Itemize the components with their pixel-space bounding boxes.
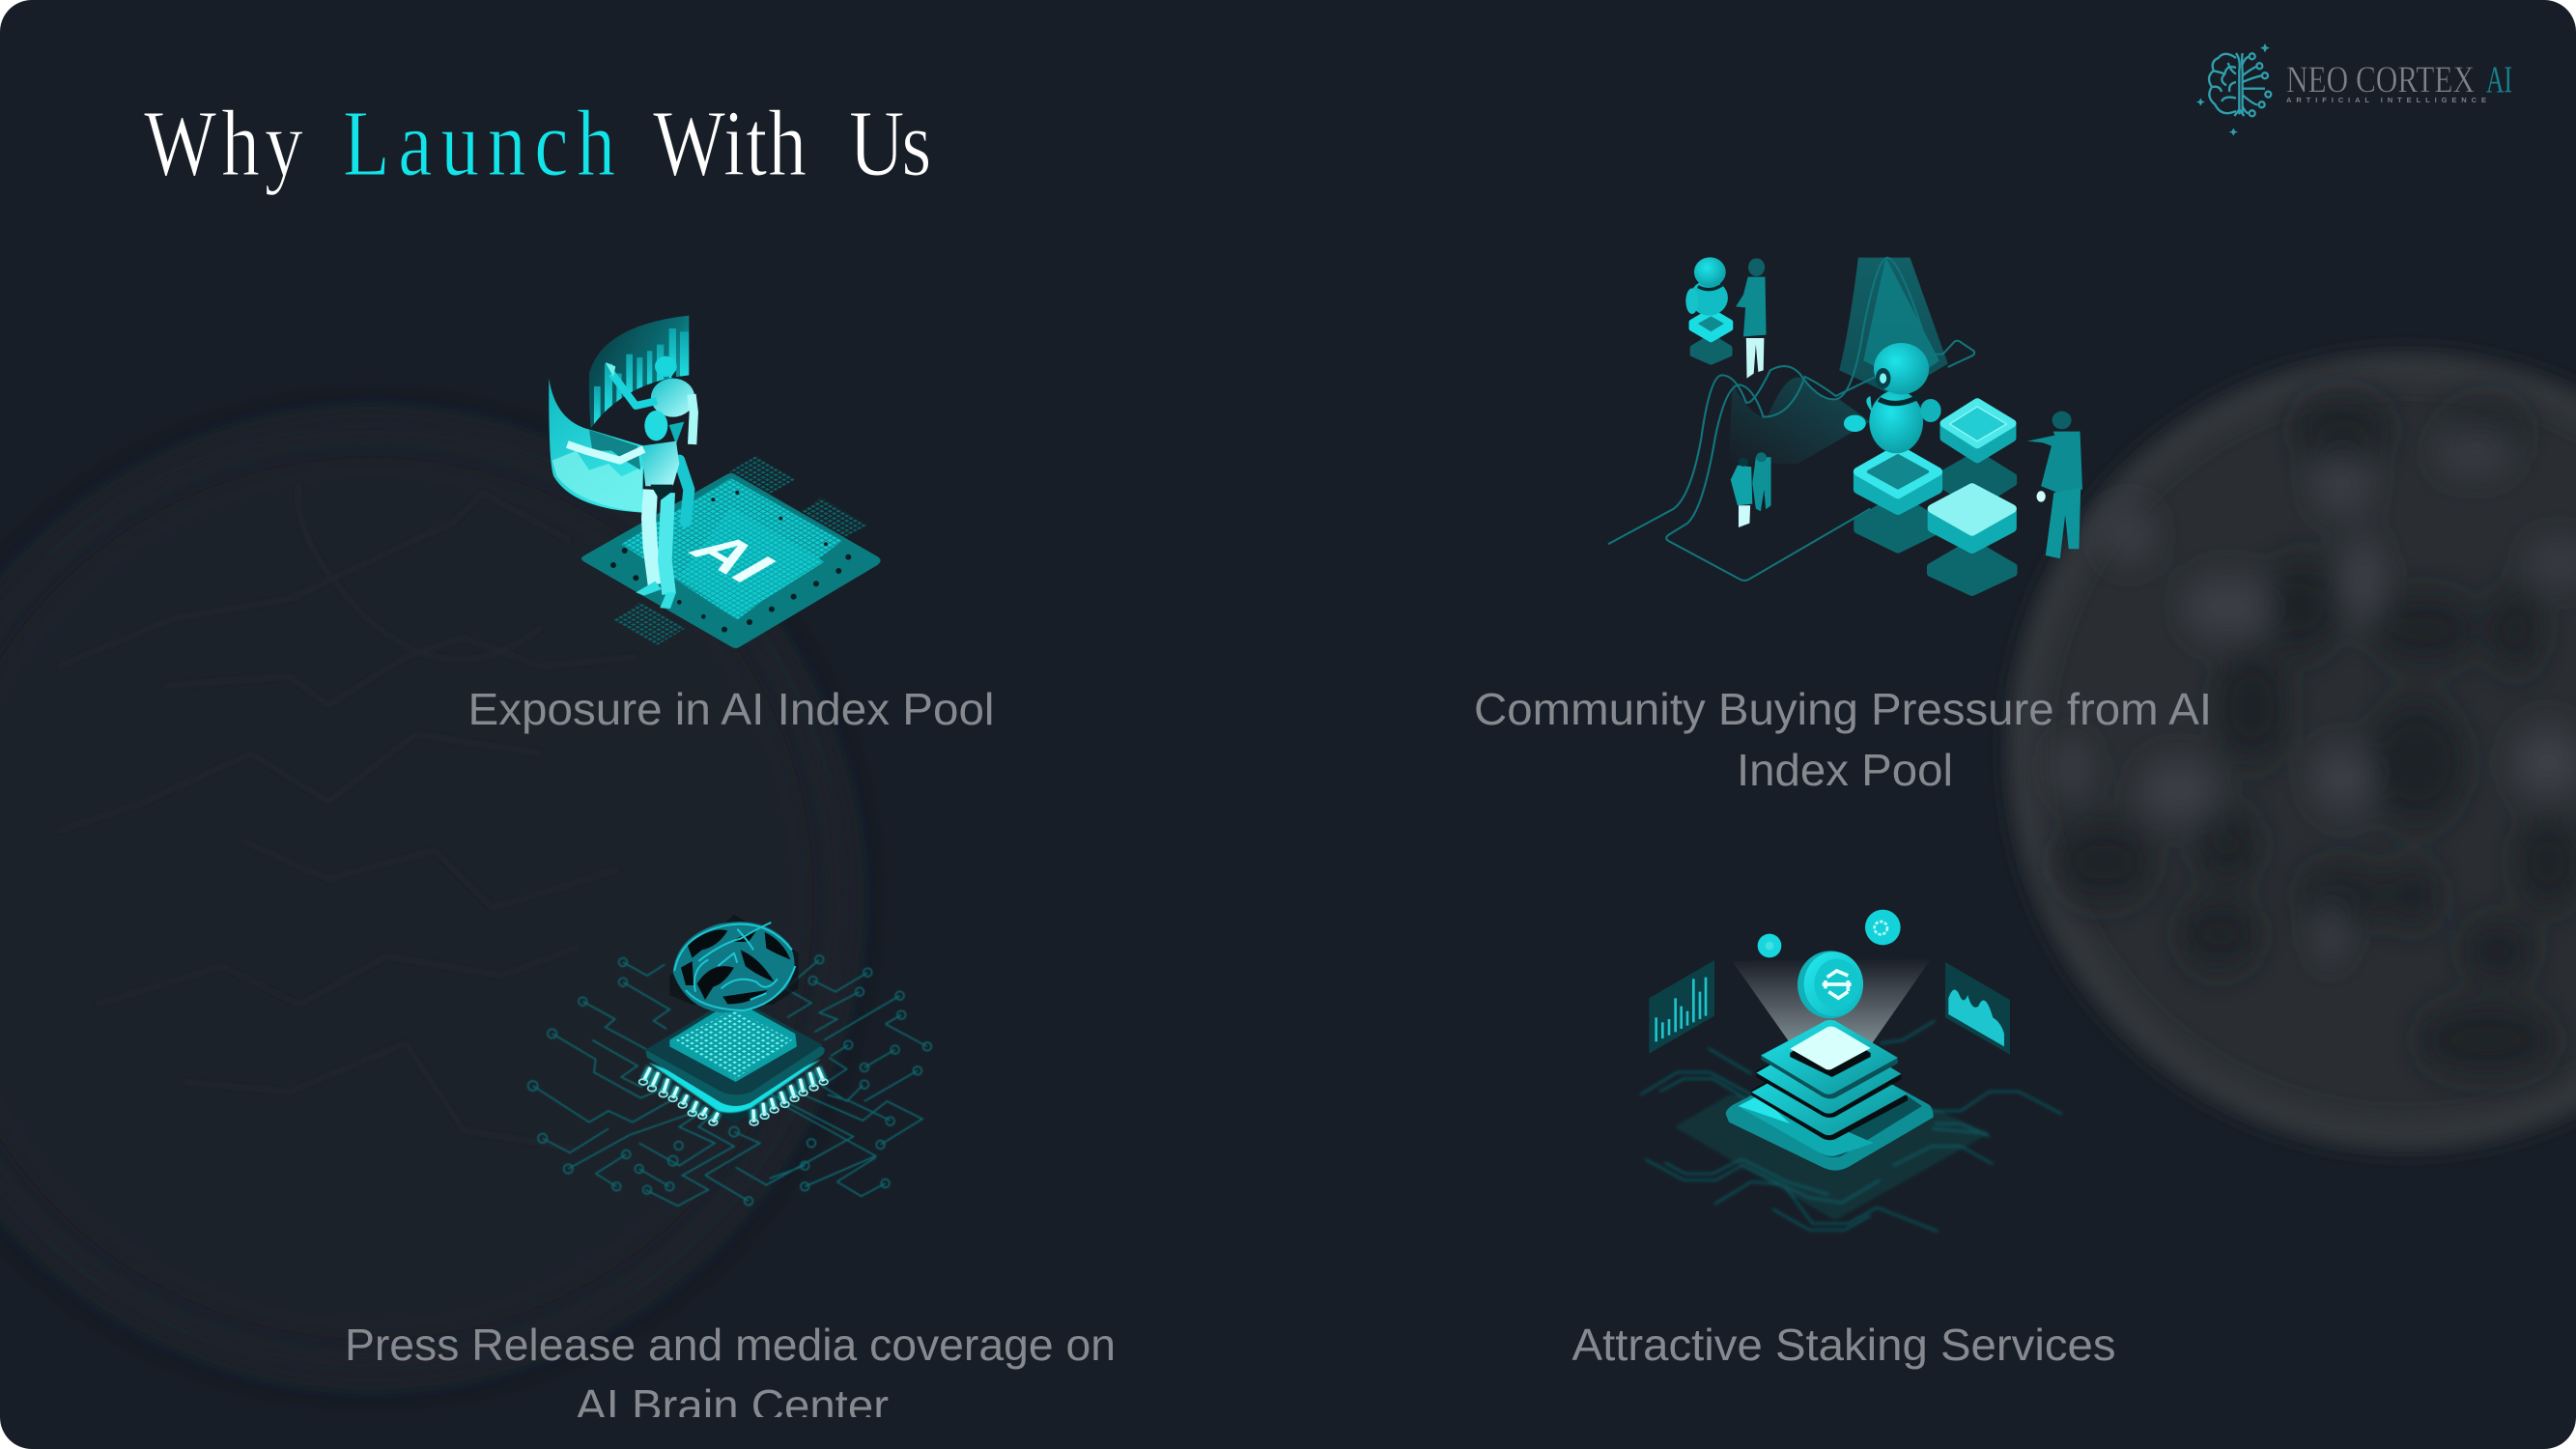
title — [144, 93, 931, 196]
main robot — [1844, 343, 1941, 453]
lower holo panel — [549, 379, 644, 513]
top left robot and woman — [1685, 257, 1767, 379]
reflection under tile A — [1858, 497, 1938, 549]
logo wordmark: NEO CORTEX — [2286, 59, 2475, 100]
title: Why — [144, 93, 303, 196]
logo: Neo Cortex AI — [2196, 43, 2512, 136]
illustration: AI board with robots — [549, 316, 881, 648]
circuit traces — [528, 955, 931, 1206]
title: With — [653, 93, 807, 196]
chart peak — [1729, 258, 1948, 464]
board label: AI — [675, 525, 790, 591]
stacked plates — [1726, 1020, 1934, 1171]
right area panel — [1945, 962, 2010, 1055]
caption: Press Release and media coverage on AI Brain Center: Press Release and media coverage on — [345, 1320, 1116, 1370]
tile A — [1858, 449, 1938, 510]
caption: Press Release and media coverage on AI Brain Center: AI Brain Center — [576, 1380, 889, 1431]
tile B — [1944, 403, 2012, 459]
small people — [1731, 452, 1771, 527]
illustration: community and robots — [1608, 257, 2082, 592]
left bar panel — [1649, 960, 1714, 1054]
caption: Community Buying Pressure from AI Index Pool — [1474, 684, 2212, 795]
caption: Attractive Staking Services: Attractive Staking Services — [1572, 1320, 2115, 1370]
upper holo panel — [589, 316, 689, 432]
stacked tiles — [1858, 403, 2014, 592]
caption: Community Buying Pressure from AI Index Pool: Community Buying Pressure from AI — [1474, 684, 2212, 734]
logo: Neo Cortex AI: AI — [2486, 59, 2512, 100]
caption: Exposure in AI Index Pool: Exposure in AI Index Pool — [467, 684, 995, 734]
reflection under tile B — [1938, 454, 2014, 505]
tile C — [1933, 488, 2012, 549]
front robot — [567, 411, 684, 609]
caption: Press Release and media coverage on AI Brain Center — [348, 1327, 1113, 1417]
brain — [669, 915, 799, 1012]
chart lines — [1608, 258, 1974, 581]
small coins — [1758, 910, 1901, 957]
dark dotted patches — [613, 456, 867, 645]
rear robot — [606, 356, 694, 522]
illustration: staking stack with coins — [1640, 910, 2062, 1232]
glowing ground circuit — [1640, 1021, 2062, 1232]
background sphere right — [2012, 357, 2576, 1146]
main coin — [1798, 951, 1863, 1018]
reflection under tile C — [1931, 543, 2014, 592]
AI board — [581, 473, 881, 648]
caption: Community Buying Pressure from AI Index Pool: Index Pool — [1737, 745, 1953, 795]
pointing man — [2027, 412, 2082, 558]
light beam — [1732, 958, 1932, 1065]
title: Launch — [343, 93, 615, 196]
title: Us — [849, 93, 931, 196]
logo: Neo Cortex AI: ARTIFICIAL INTELLIGENCE — [2286, 96, 2486, 104]
icon: circuit brain — [2196, 43, 2271, 136]
illustration: brain on chip — [528, 915, 931, 1206]
chip pins — [639, 1067, 828, 1125]
background sphere left — [0, 427, 843, 1370]
chip body — [645, 1003, 825, 1123]
